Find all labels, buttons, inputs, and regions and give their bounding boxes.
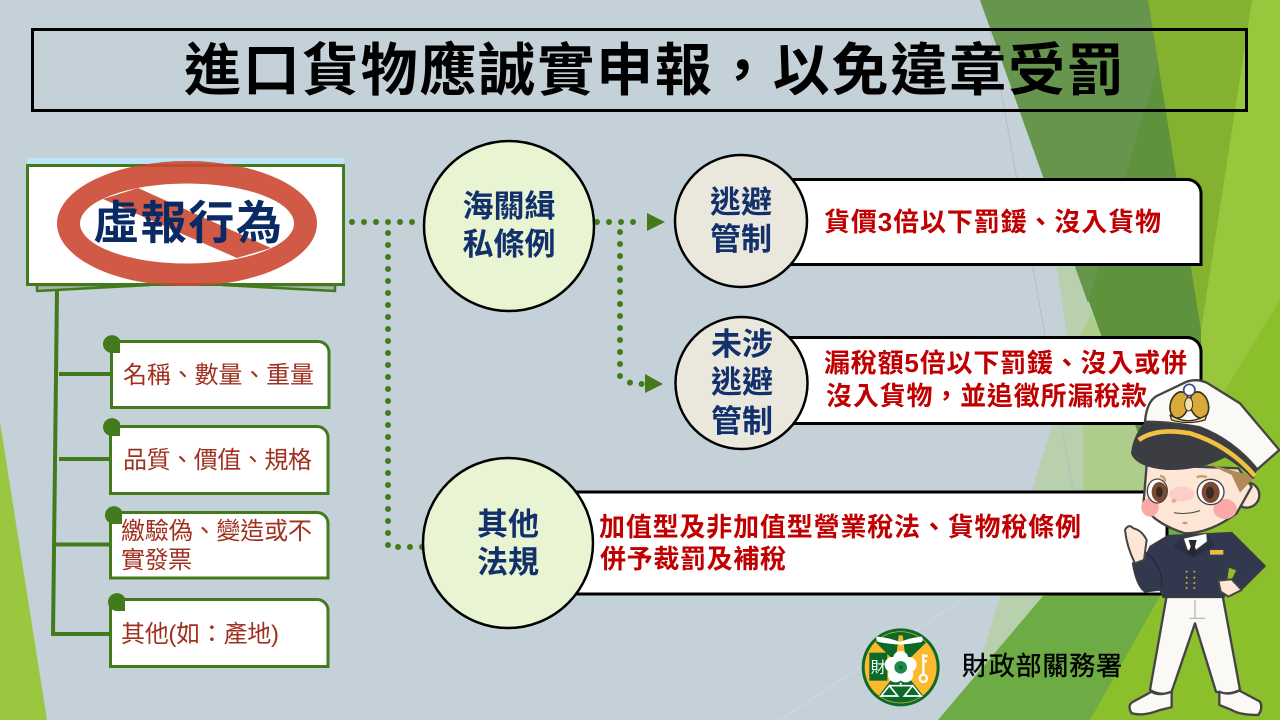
title <box>32 30 1246 110</box>
circle: other regulations: 法規 <box>477 545 539 580</box>
heading text: 虛報行為 <box>93 197 282 249</box>
cap badge <box>1167 384 1211 422</box>
circle: evasion control <box>675 155 807 287</box>
trousers <box>1150 596 1240 694</box>
panel: penalty box 3: 併予裁罰及補稅 <box>600 544 786 574</box>
circle: other regulations: 其他 <box>477 507 539 542</box>
panel: penalty box 3: 加值型及非加值型營業稅法、貨物稅條例 <box>599 512 1081 542</box>
agency name: 財政部關務署 <box>962 651 1122 681</box>
circle: customs anti-smuggling act: 私條例 <box>462 227 556 262</box>
circle: non-evasion control: 逃避 <box>711 365 773 400</box>
panel: penalty box 1 <box>770 180 1201 264</box>
circle: evasion control: 逃避 <box>710 185 772 220</box>
circle: non-evasion control <box>676 317 808 449</box>
cap <box>1145 380 1279 469</box>
list item: other origin <box>108 593 328 666</box>
circle: customs anti-smuggling act: 海關緝 <box>462 189 556 224</box>
list item: forged invoices: 繳驗偽、變造或不 <box>121 518 312 545</box>
logo: customs emblem: 財 <box>871 660 886 677</box>
character: customs officer mascot <box>1125 380 1279 715</box>
arrow: to evasion control <box>647 213 665 231</box>
jacket <box>1133 533 1265 597</box>
panel: false declaration heading <box>27 158 344 291</box>
panel: penalty box 2: 沒入貨物，並追徵所漏稅款 <box>826 381 1147 411</box>
head <box>1143 465 1252 533</box>
list item: other origin: 其他(如：產地) <box>121 621 279 648</box>
list item: name quantity weight: 名稱、數量、重量 <box>123 362 314 389</box>
hands <box>1125 526 1147 563</box>
shoes <box>1130 692 1172 714</box>
circle: customs anti-smuggling act <box>424 141 594 311</box>
panel: penalty box 3 <box>550 492 1167 594</box>
panel: penalty box 2: 漏稅額5倍以下罰鍰、沒入或併 <box>824 348 1187 378</box>
blush <box>1141 498 1159 517</box>
list item: name quantity weight <box>103 335 329 408</box>
list item: quality value spec: 品質、價值、規格 <box>123 447 312 474</box>
ear <box>1234 482 1259 508</box>
panel: penalty box 1: 貨價3倍以下罰鍰、沒入貨物 <box>824 207 1161 237</box>
title: 進口貨物應誠實申報，以免違章受罰 <box>184 39 1124 103</box>
list item: forged invoices <box>105 506 328 578</box>
arrow: to non-evasion control <box>645 374 663 393</box>
panel: penalty box 2 <box>770 338 1201 424</box>
eyes <box>1147 479 1167 503</box>
hair <box>1207 463 1255 493</box>
icon: prohibition sign <box>57 161 317 286</box>
circle: evasion control: 管制 <box>710 222 772 257</box>
list item: quality value spec <box>103 418 328 494</box>
logo: customs emblem <box>862 627 940 710</box>
circle: non-evasion control: 未涉 <box>711 327 773 362</box>
circle: non-evasion control: 管制 <box>711 404 773 439</box>
list item: forged invoices: 實發票 <box>121 547 192 574</box>
panel: false declaration list connector trunk <box>53 289 112 636</box>
circle: other regulations <box>423 458 593 628</box>
dotted connectors <box>352 222 645 547</box>
